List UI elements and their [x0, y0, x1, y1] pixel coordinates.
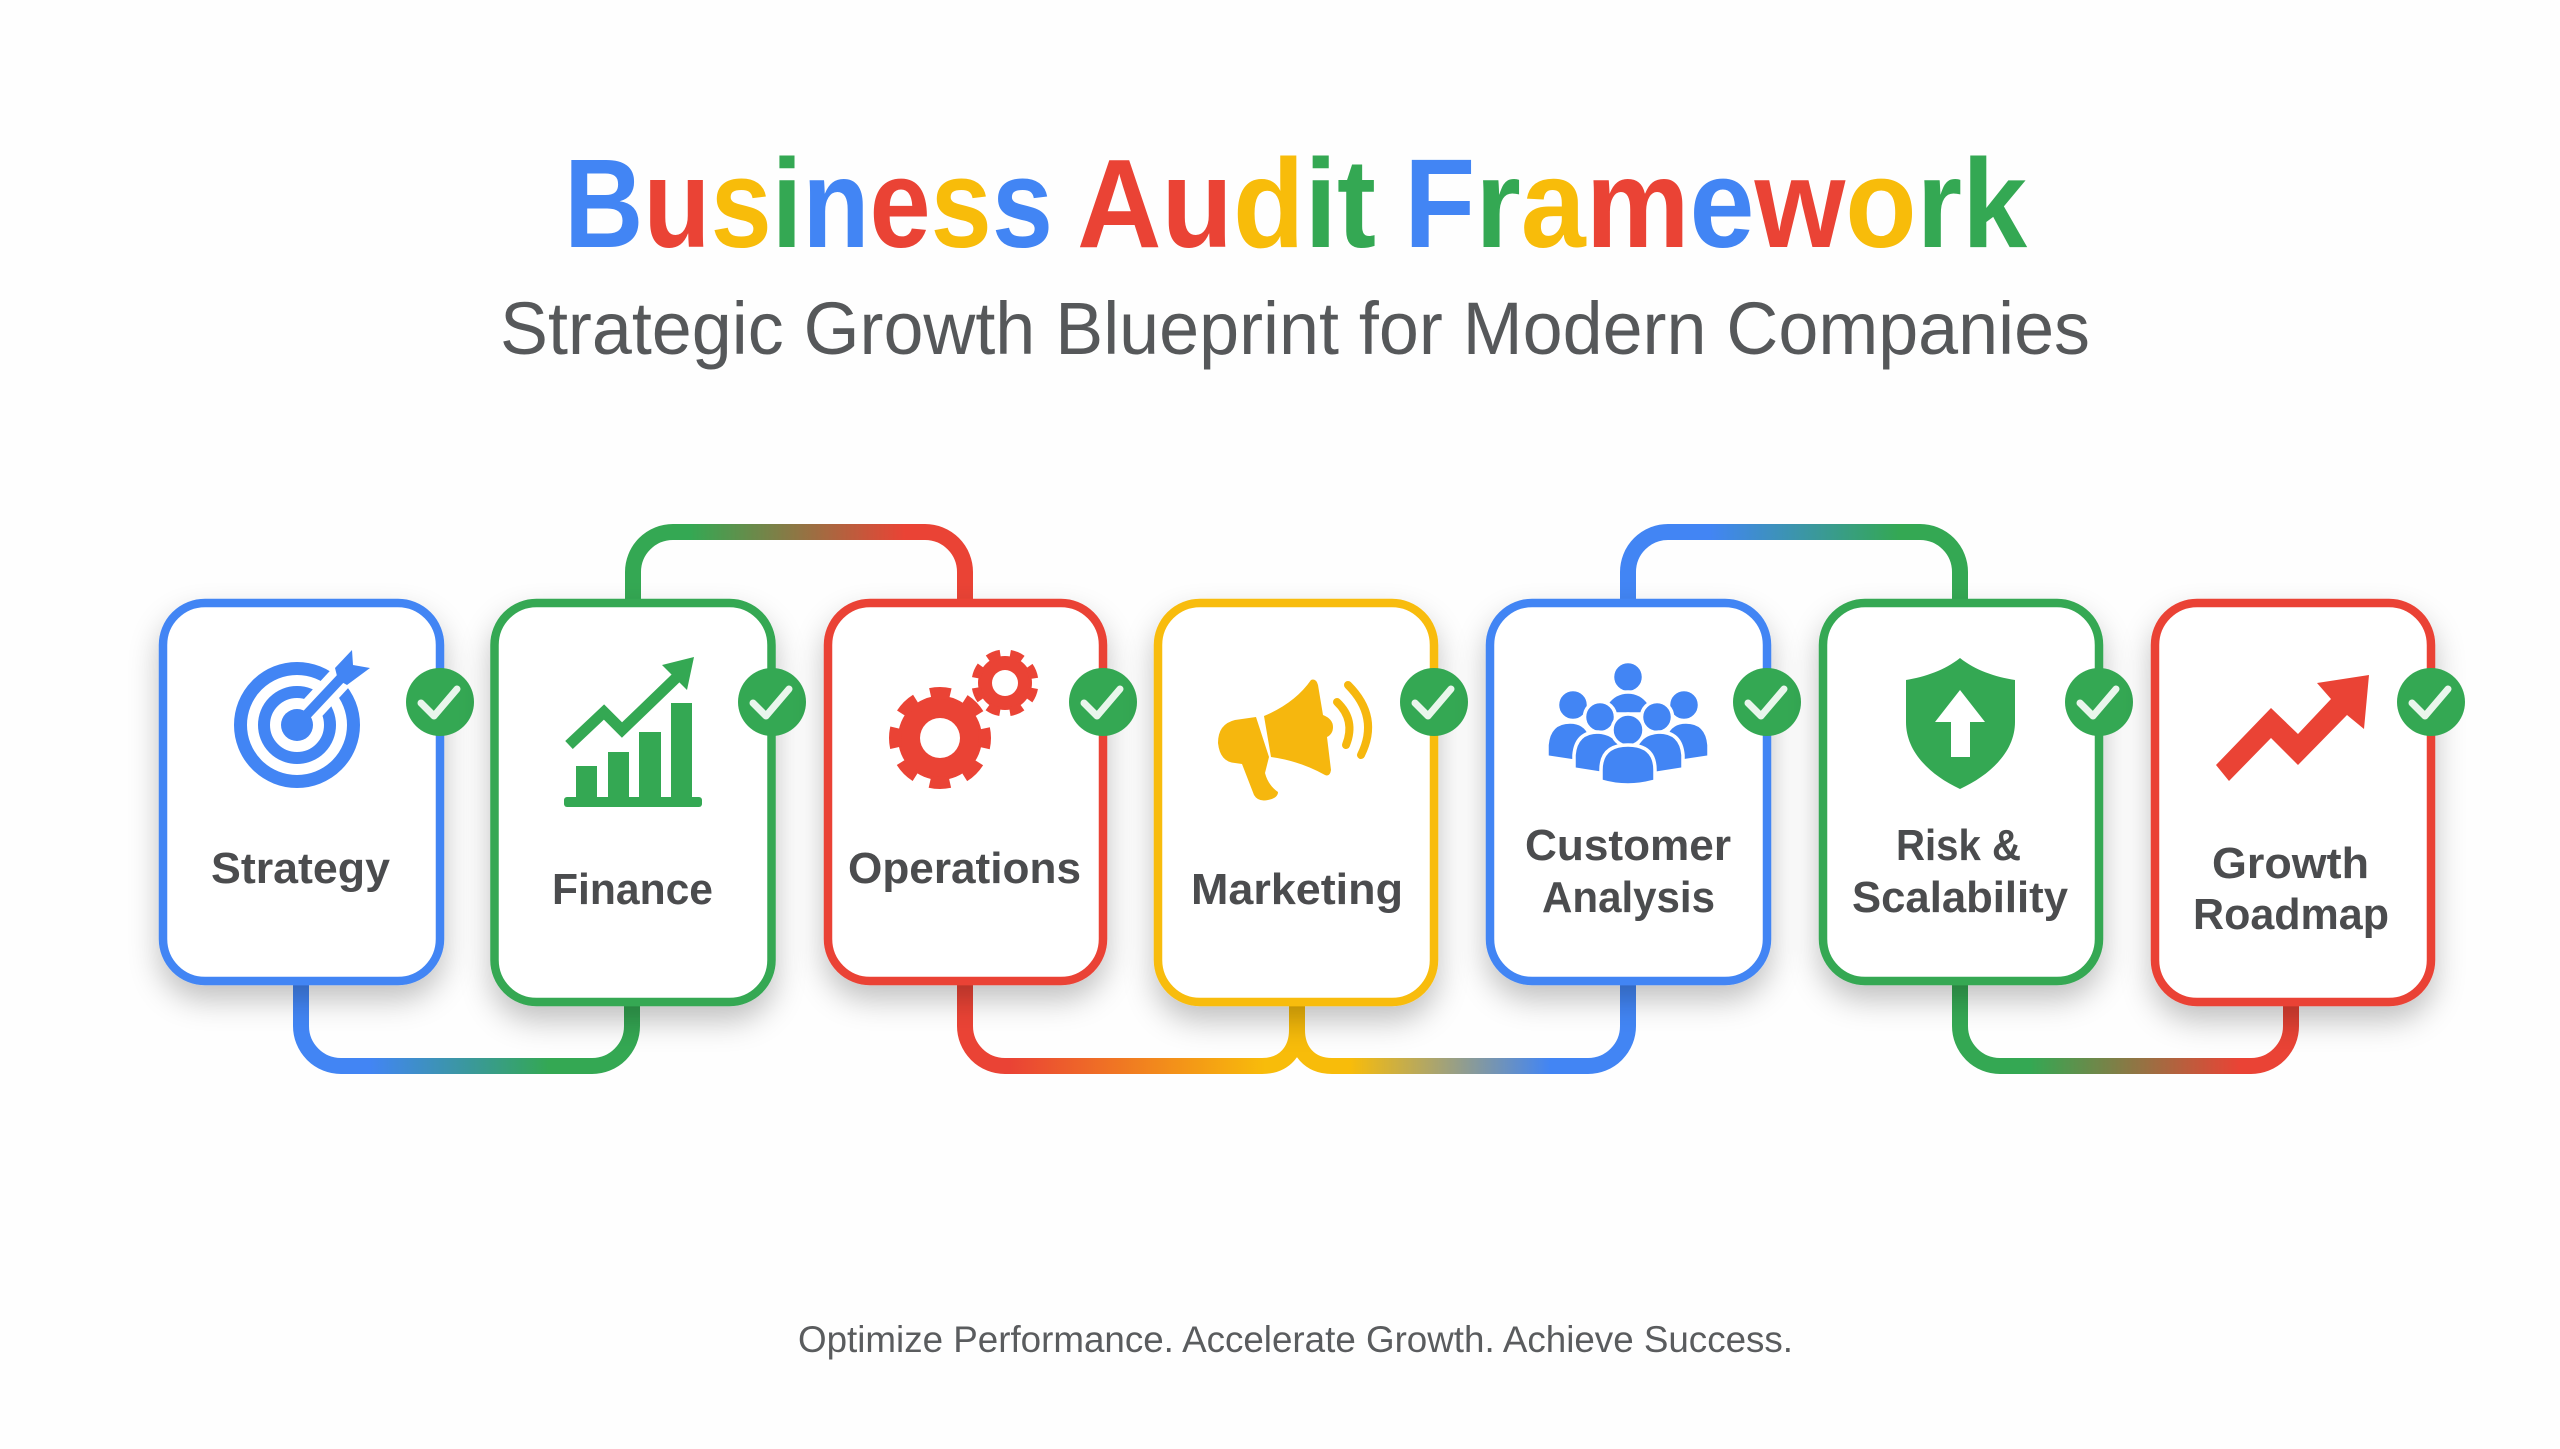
connector: Finance to Operations [633, 532, 965, 606]
badge: check [2397, 668, 2465, 736]
title [564, 133, 2028, 274]
connector: Marketing to Customer Analysis [1297, 980, 1628, 1066]
panel: Finance [494, 603, 806, 1002]
label [2193, 839, 2389, 939]
connector: Strategy to Finance [301, 980, 632, 1066]
label: Finance [552, 865, 713, 914]
panel: Marketing [1158, 603, 1468, 1002]
connector: Customer Analysis to Risk [1628, 532, 1960, 606]
label: Roadmap [2193, 890, 2389, 939]
badge: check [406, 668, 474, 736]
icon: growth arrow [2216, 675, 2369, 781]
label: Risk & [1896, 821, 2021, 870]
icon: target [240, 650, 370, 782]
label: Scalability [1852, 873, 2069, 922]
badge: check [2065, 668, 2133, 736]
icon: gears [895, 645, 1043, 783]
icon: people group [1547, 662, 1709, 785]
label: Strategy [211, 844, 391, 893]
connectors [301, 532, 2291, 1066]
label [1525, 821, 1731, 922]
badge: check [1733, 668, 1801, 736]
panel: Strategy [163, 603, 474, 981]
footer tagline: Optimize Performance. Accelerate Growth. Achieve Success. [798, 1319, 1793, 1360]
icon: megaphone [1218, 680, 1368, 800]
title: Business [564, 133, 1053, 274]
label: Customer [1525, 821, 1731, 870]
label: Operations [848, 844, 1081, 893]
label: Growth [2212, 839, 2369, 888]
label [1852, 821, 2069, 922]
badge: check [738, 668, 806, 736]
panel: Growth Roadmap [2155, 603, 2465, 1002]
panel: Customer Analysis [1490, 603, 1801, 981]
label: Analysis [1542, 873, 1715, 922]
badge: check [1069, 668, 1137, 736]
title: Audit [1077, 133, 1376, 274]
icon: shield [1906, 658, 2015, 789]
badge: check [1400, 668, 1468, 736]
panel: Operations [828, 603, 1137, 981]
label: Marketing [1191, 865, 1403, 914]
connector: Risk to Growth Roadmap [1960, 980, 2291, 1066]
title: Framework [1404, 133, 2028, 274]
icon: bar chart with arrow [564, 657, 702, 807]
panel: Risk & Scalability [1823, 603, 2133, 981]
subtitle: Strategic Growth Blueprint for Modern Companies [500, 287, 2090, 370]
connector: Operations to Marketing [965, 980, 1297, 1066]
